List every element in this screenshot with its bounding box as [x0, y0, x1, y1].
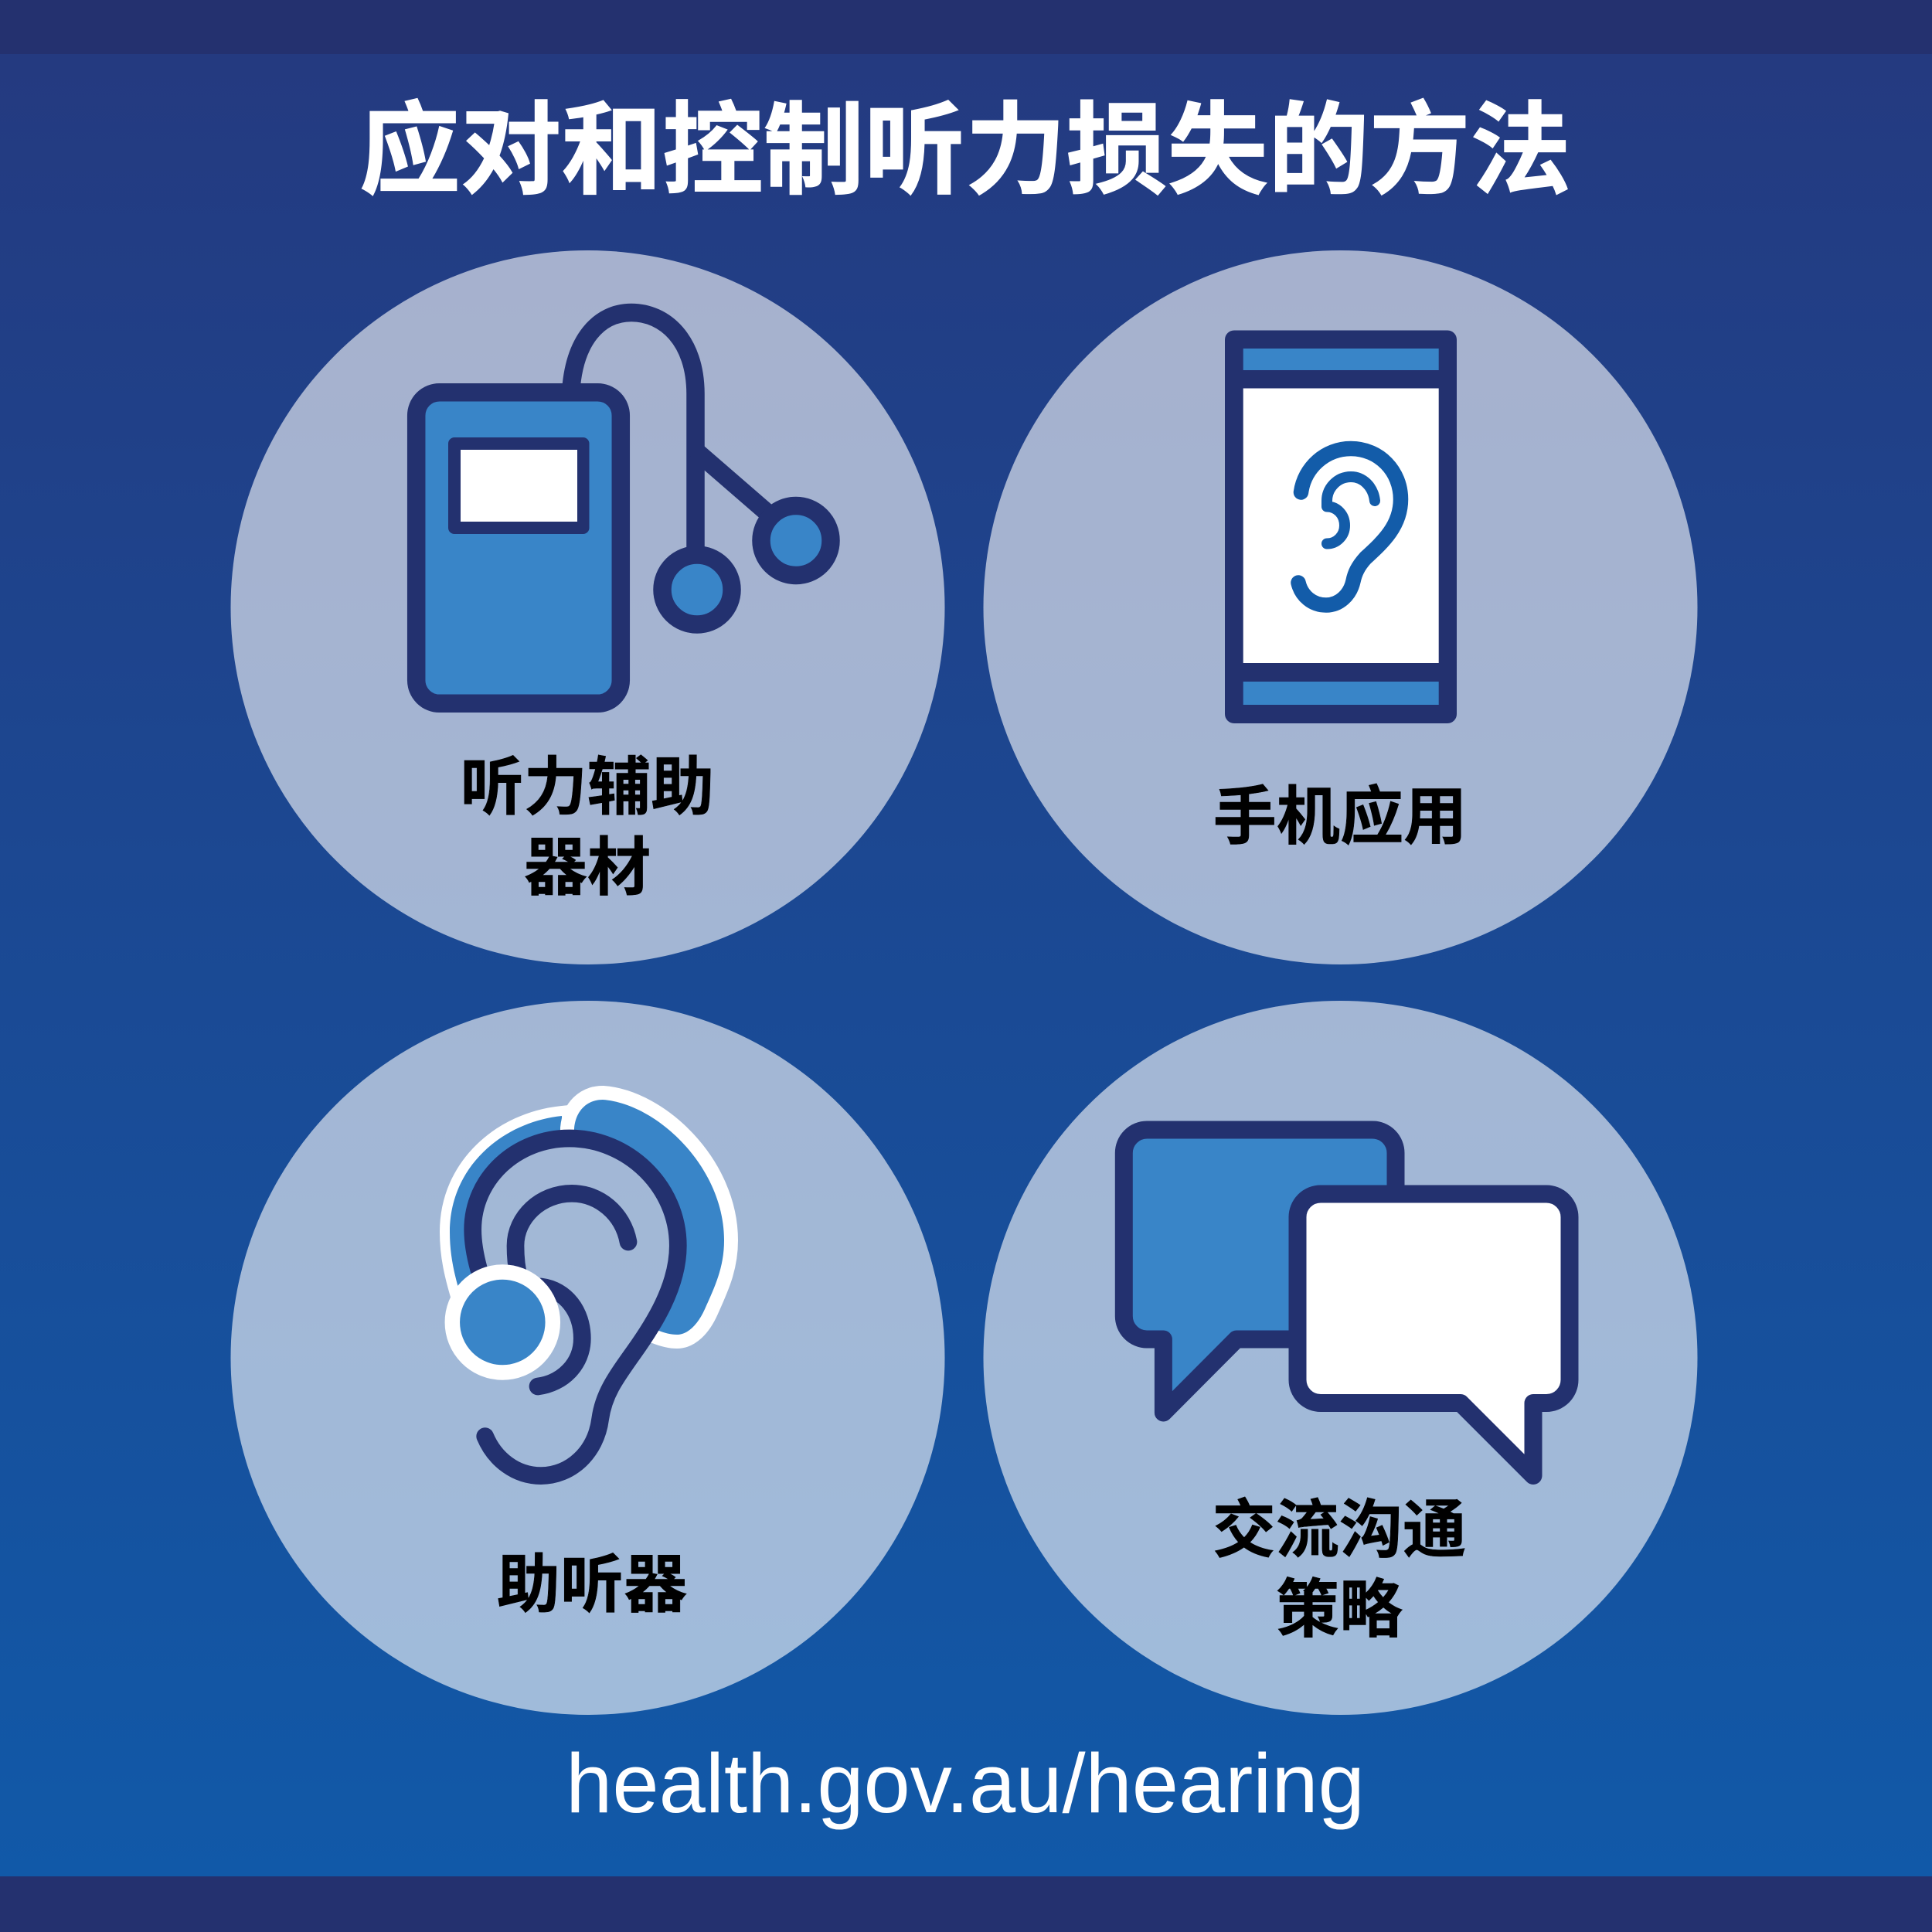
- title: 应对和控制听力损失的方法: [359, 94, 1571, 207]
- panel: assistive listening devices: [230, 250, 944, 964]
- panel: communication strategies: [983, 1001, 1697, 1715]
- icon: personal listening device: [417, 312, 831, 703]
- panel: hearing aids: [230, 1001, 944, 1715]
- label: 交流沟通: [1213, 1495, 1466, 1566]
- label: [461, 753, 714, 903]
- label: 手机应用: [1213, 782, 1467, 852]
- label: 器材: [524, 833, 651, 903]
- label: [1213, 1495, 1466, 1645]
- icon: phone with ear: [1225, 331, 1457, 723]
- label: 听力辅助: [461, 753, 714, 823]
- label: 策略: [1276, 1575, 1403, 1645]
- label: 助听器: [497, 1550, 687, 1621]
- icon: hearing aid on ear: [450, 1100, 724, 1476]
- website url: health.gov.au/hearing: [566, 1736, 1365, 1830]
- panel: phone apps: [983, 250, 1697, 964]
- icon: speech bubbles: [1124, 1130, 1570, 1476]
